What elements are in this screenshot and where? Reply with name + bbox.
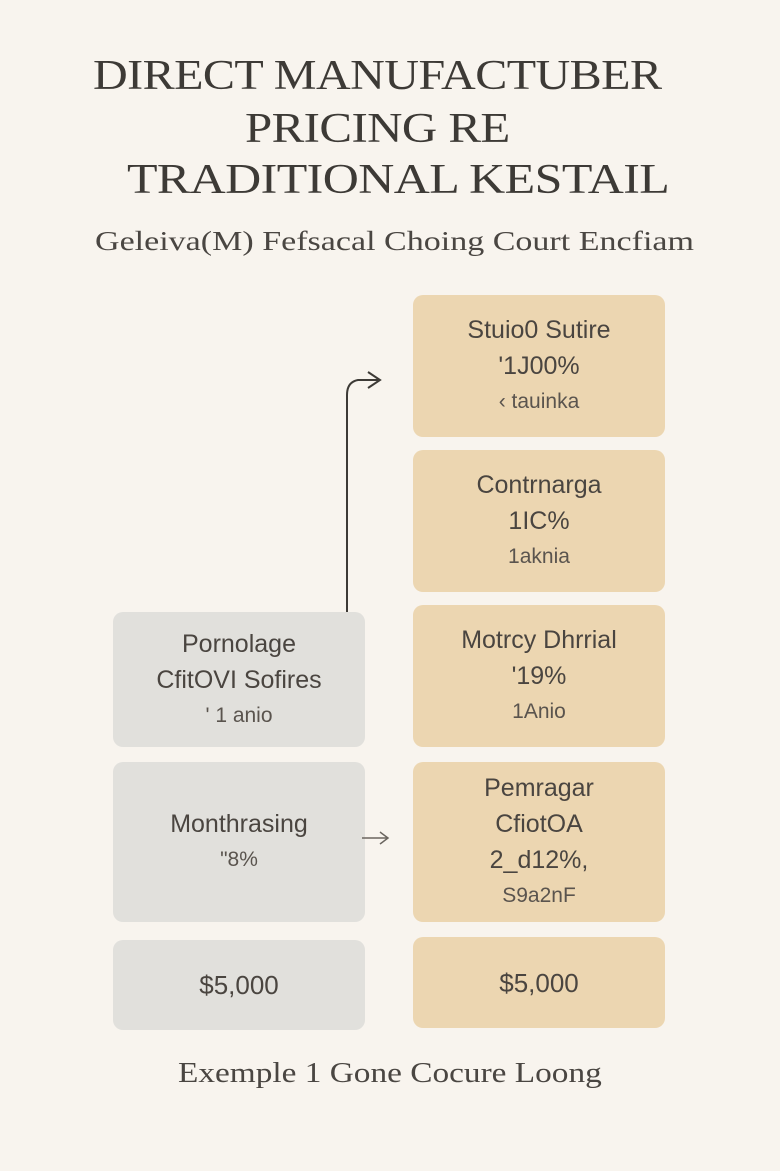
right box 3: Motrcy Dhrrial [461, 626, 617, 654]
left box 1 [113, 612, 365, 747]
arrow: small right [362, 832, 390, 844]
text: TRADITIONAL KESTAIL [127, 157, 669, 203]
text: DIRECT MANUFACTUBER [93, 53, 661, 99]
right box 4: S9a2nF [502, 884, 576, 907]
caption: Exemple 1 Gone Cocure Loong [178, 1058, 602, 1089]
text: PRICING RE [245, 106, 510, 152]
right total [413, 937, 665, 1028]
right box 1: Stuio0 Sutire [467, 316, 611, 344]
right box 3 [413, 605, 665, 747]
left box 2: "8% [220, 848, 258, 871]
left box 2 [113, 762, 365, 922]
right box 1: '1J00% [498, 352, 580, 380]
right box 2: 1aknia [508, 545, 570, 568]
left total: $5,000 [199, 970, 279, 1000]
right box 4: 2_d12%, [490, 846, 588, 874]
right box 1 [413, 295, 665, 437]
subtitle: Geleiva(M) Fefsacal Choing Court Encfiam [95, 226, 694, 256]
right box 3: '19% [512, 662, 566, 690]
right box 4: Pemragar [484, 774, 594, 802]
left box 1: Pornolage [182, 630, 296, 658]
left box 2: Monthrasing [170, 810, 308, 838]
right box 1: ‹ tauinka [499, 390, 579, 413]
right box 2: Contrnarga [476, 471, 602, 499]
left box 1: CfitOVI Sofires [156, 666, 322, 694]
title [93, 53, 669, 203]
left total [113, 940, 365, 1030]
left box 1: ' 1 anio [205, 704, 273, 726]
right total: $5,000 [499, 968, 579, 998]
right box 4: CfiotOA [495, 810, 583, 838]
right box 2 [413, 450, 665, 592]
right box 2: 1IC% [508, 507, 570, 535]
right box 3: 1Anio [512, 700, 566, 723]
right box 4 [413, 762, 665, 922]
